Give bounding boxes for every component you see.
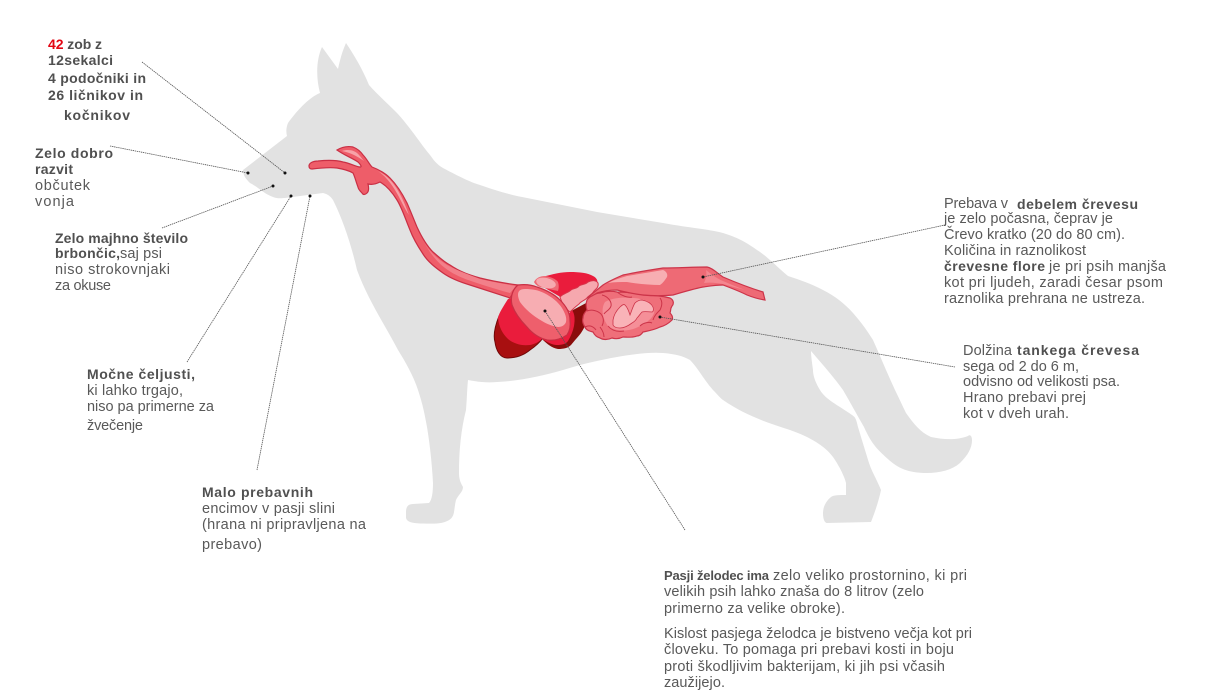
rear bright mass bbox=[542, 310, 575, 345]
leader line: large intestine bbox=[703, 225, 945, 277]
text: stomach: proti škodljivim bakterijam, ki jih psi včasih bbox=[664, 659, 945, 675]
text: small intestine: Hrano prebavi prej bbox=[963, 390, 1086, 406]
leader line: smell bbox=[110, 146, 248, 173]
text: teeth: 4 podočniki in bbox=[48, 70, 146, 86]
text: large intestine: je pri psih manjša bbox=[1048, 259, 1167, 275]
text: large intestine: Črevo kratko (20 do 80 cm). bbox=[944, 226, 1125, 243]
text: teeth: 12sekalci bbox=[48, 52, 113, 68]
text: stomach: Pasji želodec ima bbox=[664, 568, 770, 583]
text: small intestine: odvisno od velikosti psa. bbox=[963, 374, 1120, 390]
text: stomach: velikih psih lahko znaša do 8 litrov (zelo bbox=[664, 584, 924, 600]
text: jaws: žvečenje bbox=[87, 418, 143, 434]
text: taste buds: Zelo majhno število bbox=[55, 230, 188, 246]
text: small intestine: kot v dveh urah. bbox=[963, 406, 1069, 422]
dog silhouette bbox=[243, 43, 972, 524]
leader line: saliva bbox=[257, 196, 310, 470]
text: saliva enzymes: prebavo) bbox=[202, 537, 262, 553]
text: teeth bbox=[48, 36, 146, 123]
text: small intestine: tankega črevesa bbox=[1017, 342, 1139, 358]
digestive organs bbox=[309, 147, 765, 358]
text: small intestine: Dolžina bbox=[963, 343, 1013, 359]
text: stomach: zelo veliko prostornino, ki pri bbox=[773, 568, 967, 584]
upper liver lobe bbox=[543, 272, 597, 305]
anchor dots bbox=[246, 172, 704, 318]
liver, dark lower lobe bbox=[494, 316, 543, 358]
text: large intestine: je zelo počasna, čeprav je bbox=[943, 211, 1113, 227]
text: sense of smell: vonja bbox=[35, 194, 75, 210]
text: small intestine: sega od 2 do 6 m, bbox=[963, 359, 1079, 375]
stomach bbox=[511, 285, 570, 340]
text: stomach: človeku. To pomaga pri prebavi kosti in boju bbox=[664, 642, 954, 658]
text: taste buds bbox=[55, 230, 188, 294]
text: jaws bbox=[87, 366, 215, 434]
large intestine bbox=[587, 267, 765, 300]
text: sense of smell: občutek bbox=[35, 178, 91, 194]
text: taste buds: za okuse bbox=[55, 278, 111, 294]
leader line: taste bbox=[162, 186, 273, 228]
text: stomach: Kislost pasjega želodca je bistveno večja kot pri bbox=[664, 626, 972, 642]
text: teeth: 42 zob z bbox=[48, 36, 102, 52]
rear dark mass bbox=[542, 302, 588, 349]
text: teeth: 26 ličnikov in bbox=[48, 87, 143, 103]
text: sense of smell: Zelo dobro bbox=[35, 145, 113, 161]
gallbladder lobe bbox=[534, 276, 559, 291]
text: saliva enzymes bbox=[202, 484, 367, 553]
text: small intestine bbox=[963, 342, 1139, 422]
text: teeth: kočnikov bbox=[64, 107, 130, 123]
leader line: teeth bbox=[142, 62, 285, 173]
text: large intestine bbox=[943, 196, 1167, 307]
leader line: stomach bbox=[545, 311, 685, 530]
gallbladder highlight bbox=[535, 276, 557, 290]
text: taste buds: saj psi bbox=[120, 246, 162, 262]
text: large intestine: črevesne flore bbox=[944, 258, 1045, 274]
text: sense of smell bbox=[35, 145, 113, 210]
text: large intestine: Količina in raznolikost bbox=[944, 243, 1086, 259]
text: saliva enzymes: encimov v pasji slini bbox=[202, 501, 335, 517]
text: stomach bbox=[664, 568, 972, 691]
text: saliva enzymes: Malo prebavnih bbox=[202, 484, 313, 500]
text: jaws: ki lahko trgajo, bbox=[87, 383, 183, 399]
leader line: jaws bbox=[187, 196, 291, 362]
text: large intestine: raznolika prehrana ne ustreza. bbox=[944, 291, 1145, 307]
text: large intestine: kot pri ljudeh, zaradi česar psom bbox=[944, 275, 1163, 291]
text: large intestine: Prebava v bbox=[944, 196, 1009, 212]
text: stomach: primerno za velike obroke). bbox=[664, 601, 845, 617]
text: jaws: niso pa primerne za bbox=[87, 399, 215, 415]
small intestine bbox=[583, 291, 673, 340]
text: taste buds: brbončic, bbox=[55, 245, 120, 261]
pancreas bbox=[560, 281, 598, 312]
liver, bright lobe bbox=[498, 297, 543, 345]
text: jaws: Močne čeljusti, bbox=[87, 366, 195, 382]
leader line: small intestine bbox=[660, 317, 955, 367]
text: sense of smell: razvit bbox=[35, 161, 73, 177]
esophagus bbox=[309, 147, 518, 298]
text: stomach: zaužijejo. bbox=[664, 675, 725, 691]
text: taste buds: niso strokovnjaki bbox=[55, 262, 170, 278]
text: saliva enzymes: (hrana ni pripravljena na bbox=[202, 517, 367, 533]
text: large intestine: debelem črevesu bbox=[1017, 196, 1138, 212]
